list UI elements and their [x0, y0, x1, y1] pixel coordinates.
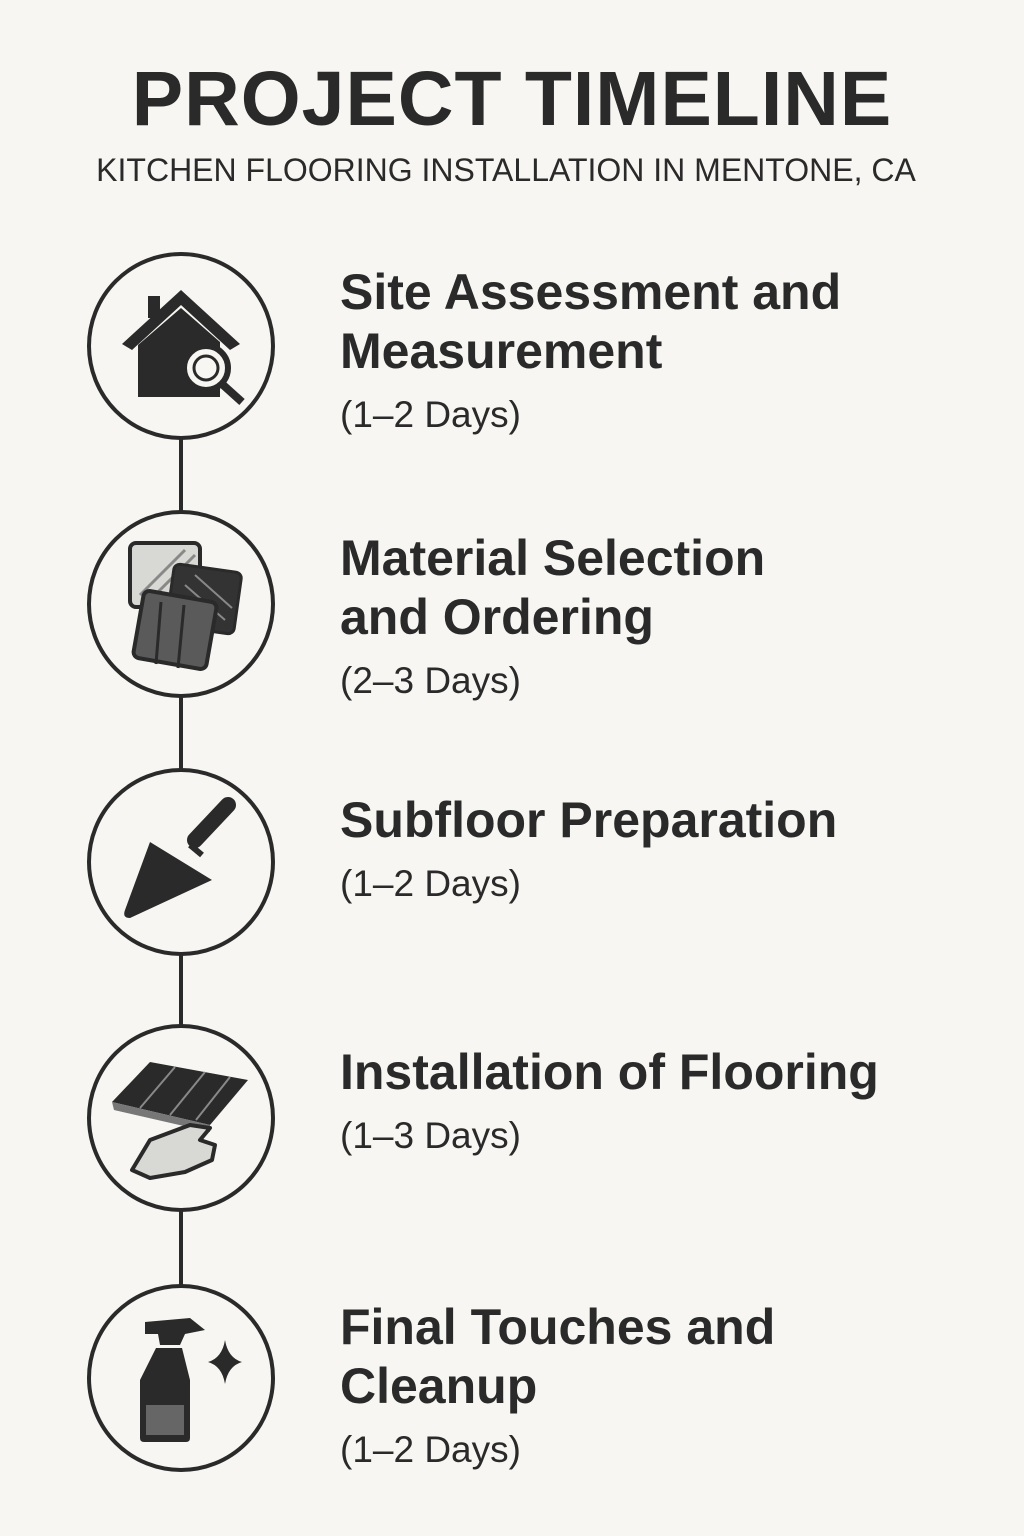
timeline icons — [87, 252, 275, 1472]
step 2 text: (2–3 Days) — [340, 660, 521, 701]
step 2 text: Material Selection — [340, 530, 765, 586]
icon: spray bottle — [89, 1286, 273, 1470]
icon: trowel — [89, 770, 273, 954]
step 4 text — [340, 1044, 879, 1156]
step 2 text — [340, 530, 765, 701]
icon: hand with plank — [89, 1026, 273, 1210]
step 1 text: (1–2 Days) — [340, 394, 521, 435]
step 3 text: Subfloor Preparation — [340, 792, 837, 848]
step 5 text: Final Touches and — [340, 1299, 775, 1355]
step 4 text: Installation of Flooring — [340, 1044, 879, 1100]
step 4 text: (1–3 Days) — [340, 1115, 521, 1156]
step 5 text — [340, 1299, 775, 1470]
icon: material samples — [89, 512, 273, 696]
step 1 text: Site Assessment and — [340, 264, 841, 320]
subtitle: KITCHEN FLOORING INSTALLATION IN MENTONE, CA — [96, 152, 916, 188]
step 1 text: Measurement — [340, 323, 662, 379]
step 3 text: (1–2 Days) — [340, 863, 521, 904]
step 3 text — [340, 792, 837, 904]
step 1 text — [340, 264, 841, 435]
step 5 text: Cleanup — [340, 1358, 537, 1414]
step 5 text: (1–2 Days) — [340, 1429, 521, 1470]
title: PROJECT TIMELINE — [132, 56, 892, 142]
step 2 text: and Ordering — [340, 589, 654, 645]
connector line — [179, 438, 183, 1286]
icon: house with magnifier — [89, 254, 273, 438]
